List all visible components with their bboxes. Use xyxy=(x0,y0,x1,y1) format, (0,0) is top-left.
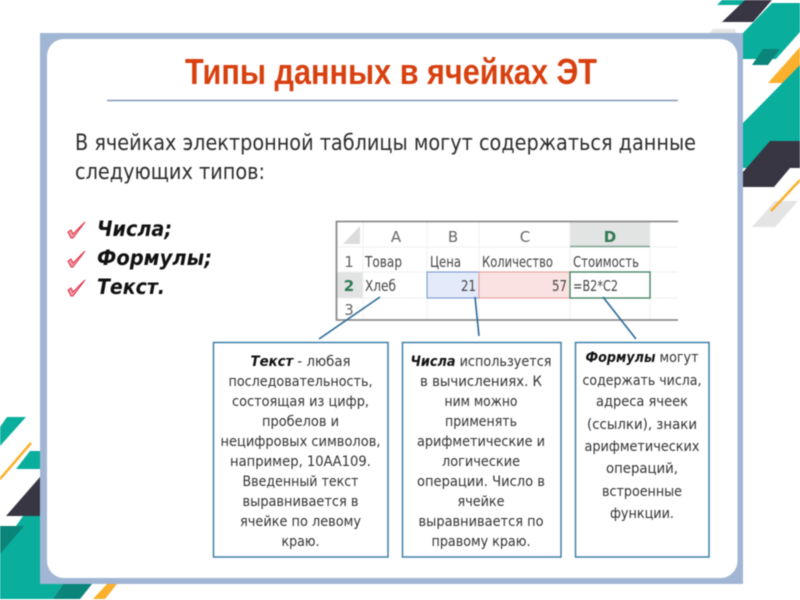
spreadsheet table: C xyxy=(520,228,530,246)
title underline xyxy=(107,100,678,102)
callout: numbers: выравнивается по xyxy=(418,514,544,530)
spreadsheet table: =B2*C2 xyxy=(573,277,618,295)
callout: text: последовательность, xyxy=(228,374,372,390)
bullet: formulas: Формулы; xyxy=(97,246,212,270)
spreadsheet table: 3 xyxy=(344,301,354,319)
callout: formulas: арифметических xyxy=(584,439,700,455)
callout: formulas: Формулы могут xyxy=(586,350,699,366)
spreadsheet table: 1 xyxy=(344,253,354,271)
callout: formulas: содержать числа, xyxy=(582,373,702,389)
spreadsheet table: 57 xyxy=(552,277,567,295)
callout: formulas: адреса ячеек xyxy=(596,394,688,410)
bullet list: data types xyxy=(68,217,212,299)
spreadsheet table: 2 xyxy=(344,277,354,295)
callout: text: нецифровых символов, xyxy=(220,434,380,450)
callout: formulas: встроенные xyxy=(602,484,682,500)
callout: numbers: применять xyxy=(445,414,517,430)
callout: formulas: функции. xyxy=(610,506,674,522)
callout: formulas: операций, xyxy=(606,461,678,477)
callout: formulas: (ссылки), знаки xyxy=(587,417,697,433)
arrow: formula cell to formulas callout xyxy=(603,297,636,339)
callout: formulas xyxy=(576,342,709,557)
callout: numbers: ним можно xyxy=(444,394,518,410)
callout: numbers: ячейке xyxy=(458,494,505,510)
intro text: В ячейках электронной таблицы могут содержаться данные xyxy=(75,131,696,156)
callout: numbers: в вычислениях. К xyxy=(420,374,543,390)
callout: text: пробелов и xyxy=(262,414,339,430)
spreadsheet table: 21 xyxy=(461,277,476,295)
spreadsheet table: Стоимость xyxy=(573,253,639,271)
spreadsheet table: Цена xyxy=(430,253,461,271)
callout: numbers: логические xyxy=(442,454,520,470)
intro text: следующих типов: xyxy=(75,160,265,185)
intro text xyxy=(75,131,696,185)
bullet: text: Текст. xyxy=(97,275,165,299)
spreadsheet table: Хлеб xyxy=(365,277,396,295)
spreadsheet table xyxy=(336,221,678,320)
spreadsheet table: Товар xyxy=(364,253,402,271)
spreadsheet table: B xyxy=(448,228,458,246)
callout: text: например, 10АА109. xyxy=(230,454,371,470)
spreadsheet table: Количество xyxy=(482,253,553,271)
title: Типы данных в ячейках ЭТ xyxy=(185,51,597,92)
callout: numbers: правому краю. xyxy=(432,534,530,550)
callout: numbers xyxy=(402,342,561,557)
callout: text: Введенный текст xyxy=(242,474,359,490)
callout: numbers: арифметические и xyxy=(417,434,545,450)
spreadsheet table: A xyxy=(391,228,402,246)
callout: numbers: Числа используется xyxy=(410,354,552,370)
callout: text xyxy=(214,342,388,557)
icon: red check mark 1 xyxy=(68,222,85,238)
callout: text: Текст - любая xyxy=(250,354,350,370)
callout: text: ячейке по левому xyxy=(240,514,361,530)
callout: text: краю. xyxy=(282,534,320,550)
arrow: text cell to text callout xyxy=(319,297,380,339)
callout: text: выравнивается в xyxy=(242,494,358,510)
spreadsheet table: D xyxy=(604,228,616,246)
icon: red check mark 3 xyxy=(68,280,85,296)
callout: numbers: операции. Число в xyxy=(417,474,545,490)
decoration: bottom left geometric shapes xyxy=(0,417,117,599)
icon: red check mark 2 xyxy=(68,251,85,267)
decoration: top right geometric shapes xyxy=(710,0,800,227)
bullet: numbers: Числа; xyxy=(97,217,172,241)
arrow: number cell to numbers callout xyxy=(475,297,479,336)
callout: text: состоящая из цифр, xyxy=(232,394,369,410)
